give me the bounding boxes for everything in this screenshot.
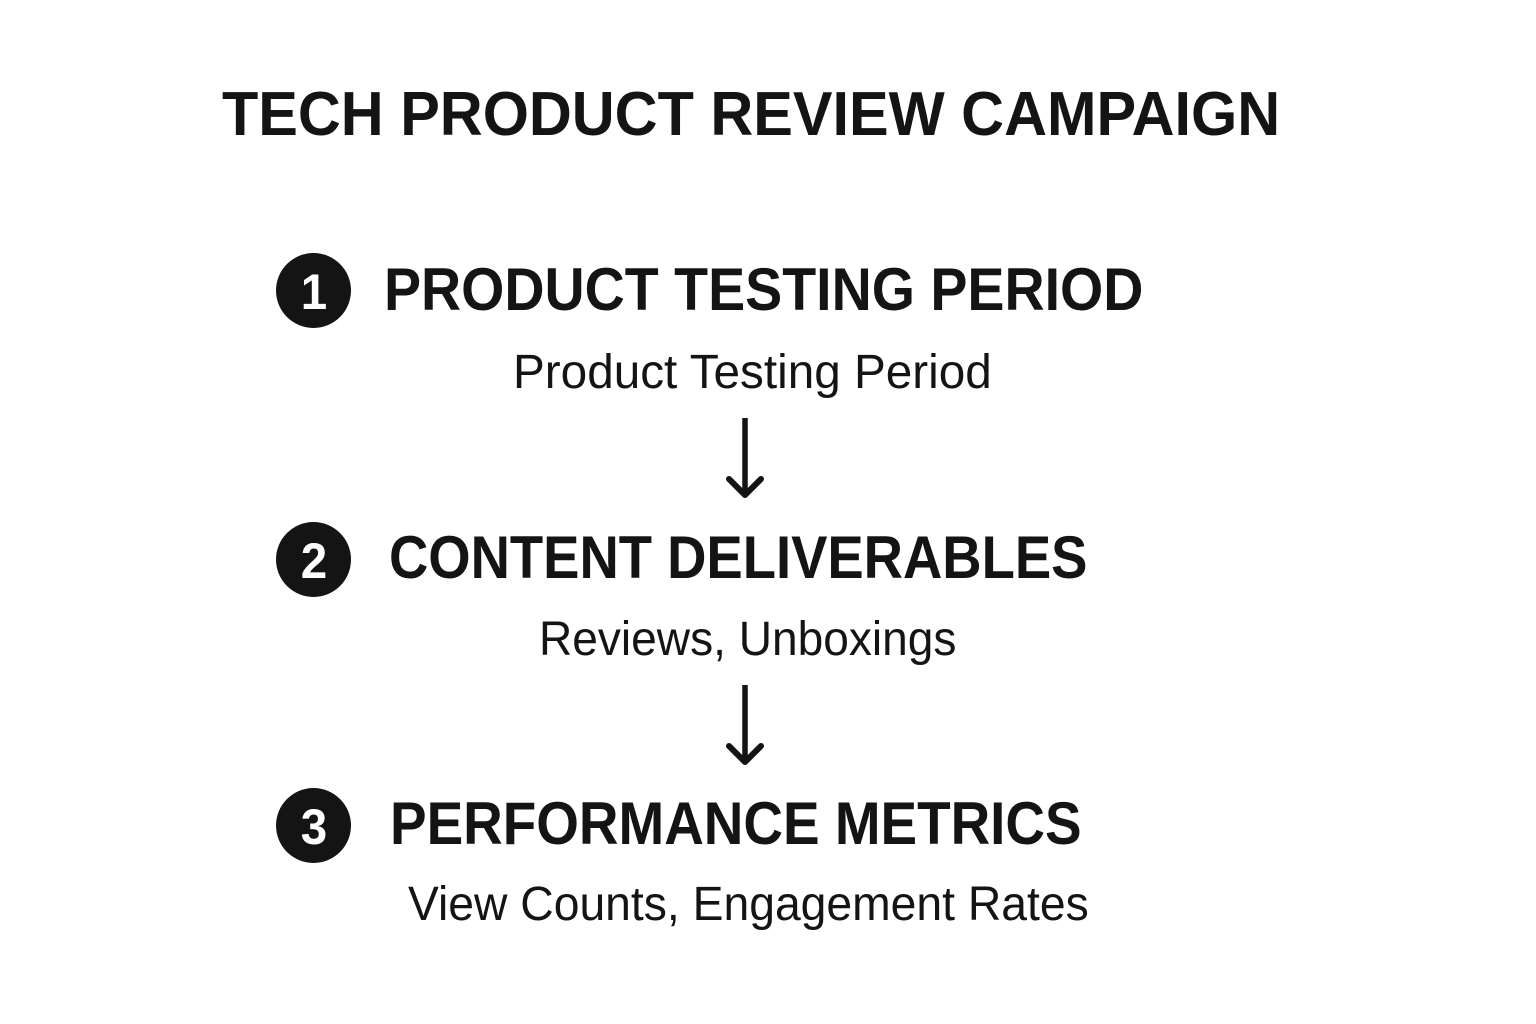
step 2 badge: 2 bbox=[300, 533, 327, 589]
step 3 badge: 3 bbox=[300, 799, 327, 855]
step 3 badge bbox=[276, 788, 351, 863]
step 3 description: View Counts, Engagement Rates bbox=[408, 877, 1089, 931]
step 1 badge bbox=[276, 253, 351, 328]
title: TECH PRODUCT REVIEW CAMPAIGN bbox=[222, 80, 1280, 149]
step 3 heading: PERFORMANCE METRICS bbox=[390, 790, 1082, 857]
step 2 description: Reviews, Unboxings bbox=[539, 612, 956, 666]
step 1 badge: 1 bbox=[300, 264, 327, 320]
step 1 heading: PRODUCT TESTING PERIOD bbox=[384, 256, 1143, 323]
step 2 heading: CONTENT DELIVERABLES bbox=[389, 524, 1087, 591]
step 1 description: Product Testing Period bbox=[513, 345, 992, 399]
step 2 badge bbox=[276, 522, 351, 597]
arrow 2 bbox=[726, 685, 764, 765]
arrow 1 bbox=[726, 418, 764, 498]
